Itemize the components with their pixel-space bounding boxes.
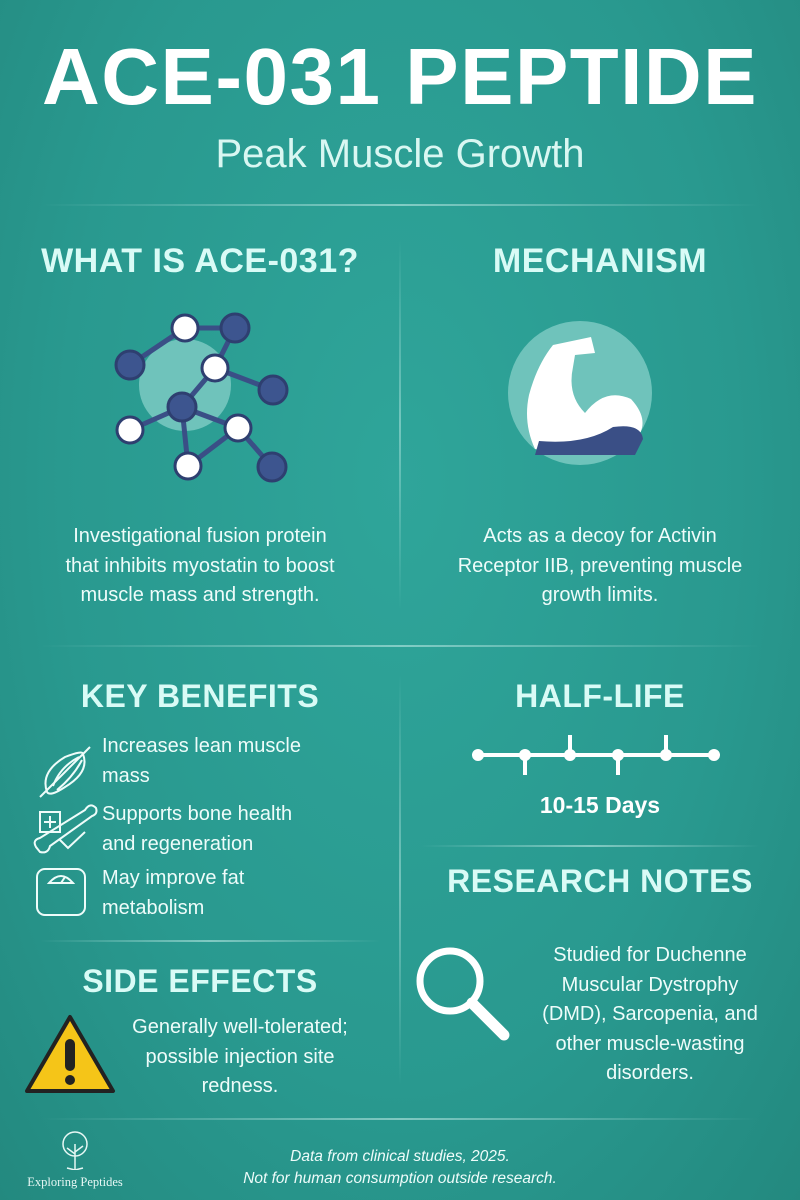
panel: what is (41, 242, 359, 606)
icon: timeline (472, 735, 720, 775)
text: side effects: redness. (202, 1075, 278, 1097)
title: ACE-031 PEPTIDE (42, 32, 758, 121)
heading: key benefits: KEY BENEFITS (81, 678, 319, 714)
text: research notes: (DMD), Sarcopenia, and (542, 1003, 758, 1025)
text: mechanism: Acts as a decoy for Activin (483, 525, 717, 547)
text: research notes: Muscular Dystrophy (562, 974, 738, 996)
icon: bone health (34, 804, 98, 854)
icon: muscle fibers (39, 746, 91, 798)
text: mechanism: Receptor IIB, preventing muscle (458, 554, 742, 576)
text: half-life value: 10-15 Days (540, 792, 660, 818)
heading: half-life: HALF-LIFE (515, 678, 685, 714)
text: side effects: Generally well-tolerated; (132, 1016, 348, 1038)
panel: side effects (25, 963, 348, 1097)
heading: mechanism: MECHANISM (493, 242, 707, 280)
benefit list: May improve fat (102, 867, 244, 889)
benefit list: Increases lean muscle (102, 735, 301, 757)
text: mechanism: growth limits. (542, 584, 658, 606)
icon: flexed arm (508, 321, 652, 465)
text: research notes: disorders. (606, 1062, 694, 1084)
text: side effects: possible injection site (146, 1046, 334, 1068)
heading: side effects: SIDE EFFECTS (82, 963, 318, 999)
icon: warning (25, 1014, 116, 1093)
benefit list: and regeneration (102, 832, 253, 854)
text: research notes: Studied for Duchenne (553, 944, 747, 966)
text: side effects (132, 1016, 348, 1097)
icon: molecule (114, 312, 288, 482)
icon: magnifier (416, 948, 510, 1040)
benefit list (34, 735, 301, 918)
text: what is (65, 525, 335, 606)
panel: mechanism (458, 242, 742, 606)
benefit list: Supports bone health (102, 803, 292, 825)
footer note (243, 1148, 557, 1187)
panel: research notes (416, 863, 758, 1084)
text: mechanism (458, 525, 742, 606)
logo (27, 1131, 123, 1189)
heading: research notes: RESEARCH NOTES (447, 863, 753, 899)
text: what is: Investigational fusion protein (73, 525, 327, 547)
panel: half-life (472, 678, 720, 818)
icon: scale (36, 868, 86, 916)
benefit list: metabolism (102, 896, 204, 918)
footer note: Data from clinical studies, 2025. (290, 1148, 510, 1165)
heading: what is: WHAT IS ACE-031? (41, 242, 359, 280)
text: research notes (542, 944, 758, 1084)
text: what is: muscle mass and strength. (80, 584, 320, 606)
logo: Exploring Peptides (27, 1175, 123, 1189)
panel: key benefits (34, 678, 319, 918)
text: research notes: other muscle-wasting (556, 1032, 744, 1054)
subtitle: Peak Muscle Growth (215, 132, 585, 176)
text: what is: that inhibits myostatin to boost (65, 554, 335, 576)
benefit list: mass (102, 764, 150, 786)
footer note: Not for human consumption outside research. (243, 1170, 557, 1187)
